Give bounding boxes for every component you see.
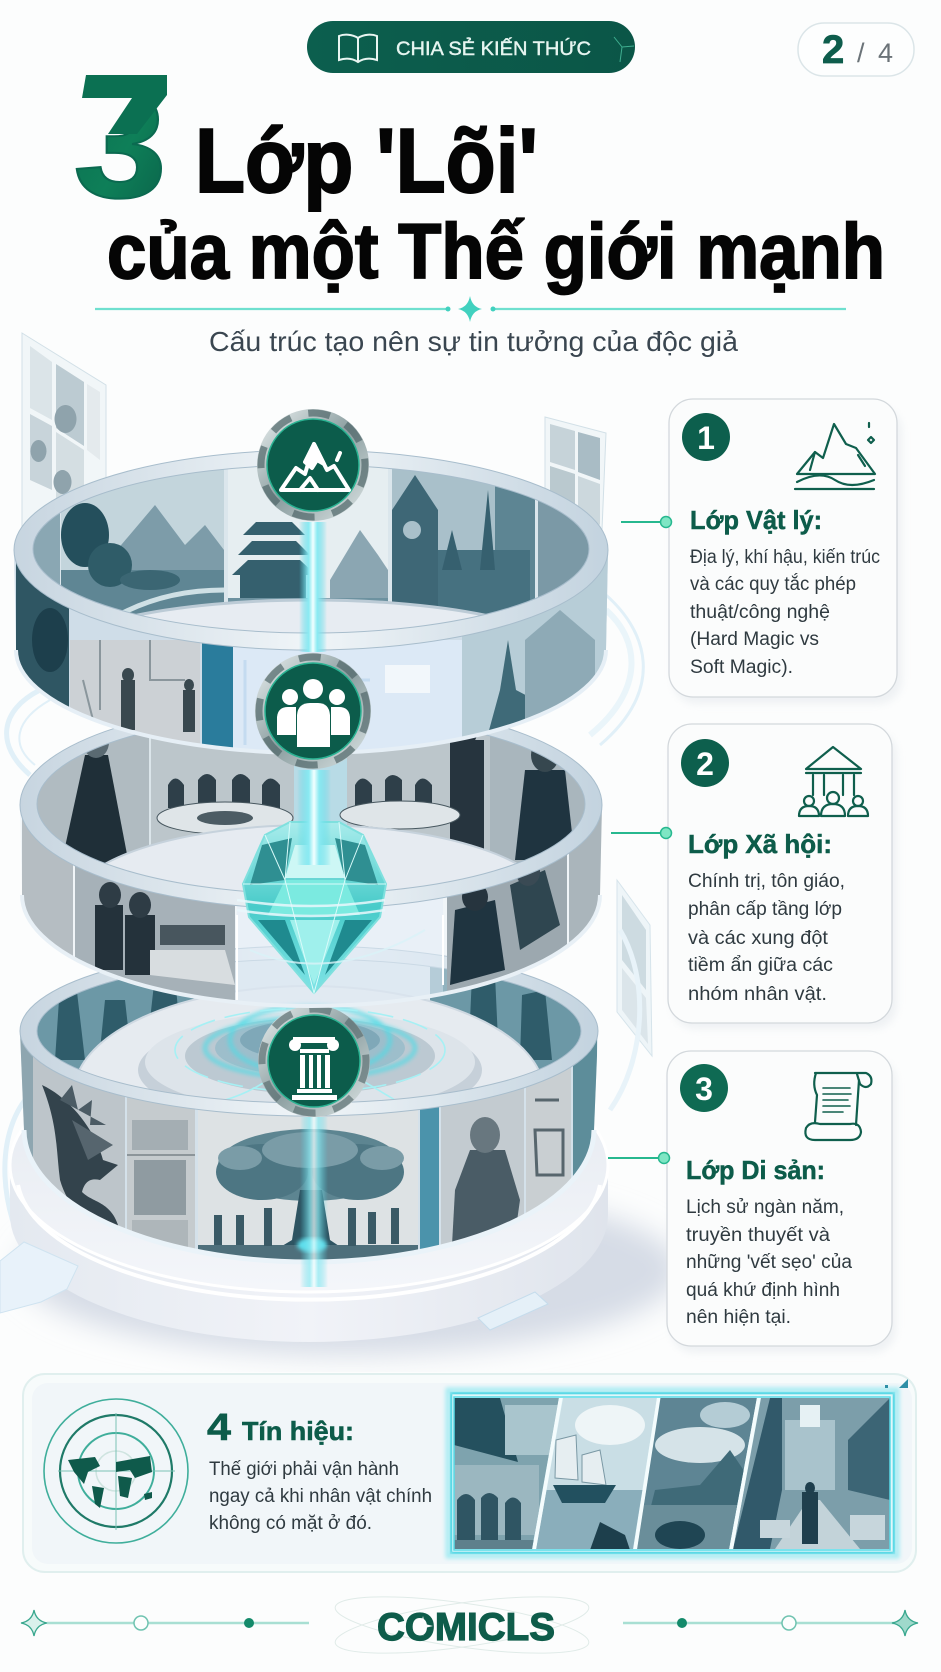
light beam middle [297, 770, 331, 865]
panel: layer 3 heritage [667, 1051, 896, 1353]
floating manga page right [545, 417, 606, 530]
panel: meeting table [75, 866, 235, 1000]
body text: (Hard Magic vs [690, 629, 819, 650]
ring 2 lower glass edge [22, 895, 600, 1006]
body text: Chính trị, tôn giáo, [688, 871, 845, 892]
footer left ornament [21, 1610, 309, 1636]
connector line 2 [611, 828, 672, 838]
panel: blue strip [202, 644, 233, 748]
title [66, 61, 885, 295]
beam lower [300, 1117, 328, 1287]
medallion 2: people [255, 653, 371, 769]
page badge: / 4 [857, 38, 893, 68]
panel: dragon [33, 1057, 125, 1228]
icon: open book [339, 35, 377, 62]
body text [690, 547, 880, 678]
medallion 3: column [258, 1005, 370, 1117]
comic strip frame [448, 1390, 897, 1556]
panel: sparring duo [447, 855, 567, 991]
panel: cloaked ally [490, 736, 584, 863]
number badge 1 [682, 413, 730, 461]
icon: mountains [795, 423, 875, 489]
soft ground shadow [20, 1185, 680, 1355]
panel: council right [340, 735, 490, 850]
panel: mountain landscape [61, 470, 224, 614]
icon: radar world map [44, 1399, 188, 1543]
panel: 4 signals [23, 1374, 916, 1572]
title line 2: của một Thế giới mạnh [107, 207, 885, 295]
body text [209, 1459, 432, 1534]
ring 3: heritage layer [15, 946, 605, 1287]
panel: warrior [441, 1088, 524, 1244]
floating manga page left [22, 333, 106, 560]
panel: map [526, 1068, 571, 1212]
body text: nên hiện tại. [686, 1307, 791, 1328]
glass tower illustration [0, 333, 680, 1355]
subtitle: Cấu trúc tạo nên sự tin tưởng của độc giả [209, 326, 738, 357]
glass foot left [0, 1242, 78, 1313]
ring 1 floor [136, 598, 486, 629]
energy swirl left [5, 690, 50, 1260]
body text [688, 871, 845, 1005]
heading: 4 signals: Tín hiệu: [242, 1416, 354, 1446]
footer right ornament [623, 1610, 918, 1636]
heading: Lớp Di sản: [686, 1155, 825, 1185]
title numeral 3: 3 [73, 61, 167, 229]
white gutters [534, 1396, 759, 1551]
comic panel: market street [454, 1398, 564, 1549]
light beam upper [299, 522, 327, 652]
panel: misty spires [462, 556, 608, 736]
glass foot right [478, 1292, 548, 1330]
body text: không có mặt ở đó. [209, 1513, 372, 1534]
heading: Lớp Vật lý: [690, 505, 822, 535]
number badge 3: 3 [695, 1071, 713, 1107]
ring 1: physical layer [10, 450, 610, 760]
panel: dark foliage [16, 563, 69, 707]
ring 1 lower glass edge [16, 650, 606, 753]
body text: Thế giới phải vận hành [209, 1459, 399, 1480]
title line 1: Lớp 'Lõi' [195, 111, 538, 212]
icon: column [289, 1037, 339, 1100]
panel: council left [151, 738, 294, 844]
number badge 2 [681, 739, 729, 787]
logo COMICLS [332, 1585, 592, 1665]
icon: scroll [805, 1073, 871, 1140]
ring 1 rim [14, 450, 608, 650]
body text: và các quy tắc phép [690, 573, 856, 595]
panel: manga grid [127, 1098, 195, 1248]
faceted crystal [243, 822, 386, 993]
category pill [307, 21, 635, 73]
panel: layer 2 society [668, 724, 897, 1029]
body text: nhóm nhân vật. [688, 984, 827, 1005]
connector line 3 [608, 1152, 670, 1164]
body text: quá khứ định hình [686, 1280, 840, 1301]
number badge 1: 1 [697, 420, 715, 456]
body text: tiềm ẩn giữa các [688, 955, 833, 976]
ring 2 back wall [38, 735, 584, 890]
icon: mountain [281, 444, 349, 490]
body text: những 'vết sẹo' của [686, 1252, 852, 1273]
glass rim over crystal [237, 900, 385, 916]
ring 2 floor [104, 824, 517, 890]
heading: 4 signals [207, 1407, 354, 1449]
panel: sketched figures [70, 640, 200, 744]
comic panel: stormy coast [635, 1398, 760, 1550]
body text: Soft Magic). [690, 657, 793, 678]
logo COMICLS: COMICLS [377, 1606, 555, 1649]
panel: teal strip [420, 1107, 439, 1249]
heading: 4 signals: 4 [207, 1407, 231, 1449]
body text: thuật/công nghệ [690, 602, 830, 623]
ring 1 back wall [34, 467, 588, 632]
connector line 1 [621, 516, 672, 528]
panel: hero in cloak [38, 735, 149, 863]
floating manga page lower right [617, 880, 652, 1056]
ring 3 back wall [38, 960, 580, 1076]
icon: three people [277, 679, 350, 747]
ring 3 front panels [20, 1036, 598, 1260]
panel: great tree [198, 1110, 418, 1260]
ring 1 front panels [14, 556, 608, 750]
ring 3 rim [20, 946, 598, 1116]
divider with star [95, 296, 846, 322]
body text: ngay cả khi nhân vật chính [209, 1486, 432, 1507]
comic panel: sailing ship [535, 1398, 660, 1550]
ring 2: society layer [20, 728, 602, 1008]
panel: glass window [233, 640, 462, 760]
medallion 1: mountain [257, 409, 369, 521]
ring 2 rim [20, 701, 602, 909]
body text: Địa lý, khí hậu, kiến trúc [690, 547, 880, 568]
body text: phân cấp tầng lớp [688, 899, 842, 920]
page badge [798, 23, 914, 76]
number badge 3 [680, 1064, 728, 1112]
icon: institution and people [799, 747, 868, 816]
body text: Lịch sử ngàn năm, [686, 1197, 844, 1218]
panel: glass window [236, 915, 444, 1004]
comic panel: grand hall [730, 1398, 890, 1549]
page badge: 2 [822, 28, 844, 72]
number badge 2: 2 [696, 746, 714, 782]
central platform with cyan swirl [138, 1006, 482, 1124]
white base plate [0, 1038, 608, 1342]
body text [686, 1197, 852, 1328]
ring 3 lower glass edge [24, 1130, 594, 1262]
body text: truyền thuyết và [686, 1225, 830, 1246]
energy swirl right [590, 590, 643, 1110]
panel: gothic castle [392, 469, 535, 614]
pill label: CHIA SẺ KIẾN THỨC [396, 38, 591, 60]
panel: layer 1 physical [669, 399, 902, 704]
panel: pagoda [228, 467, 388, 602]
body text: và các xung đột [688, 928, 829, 949]
ring 2 front panels [20, 811, 602, 1004]
heading: Lớp Xã hội: [688, 829, 832, 859]
